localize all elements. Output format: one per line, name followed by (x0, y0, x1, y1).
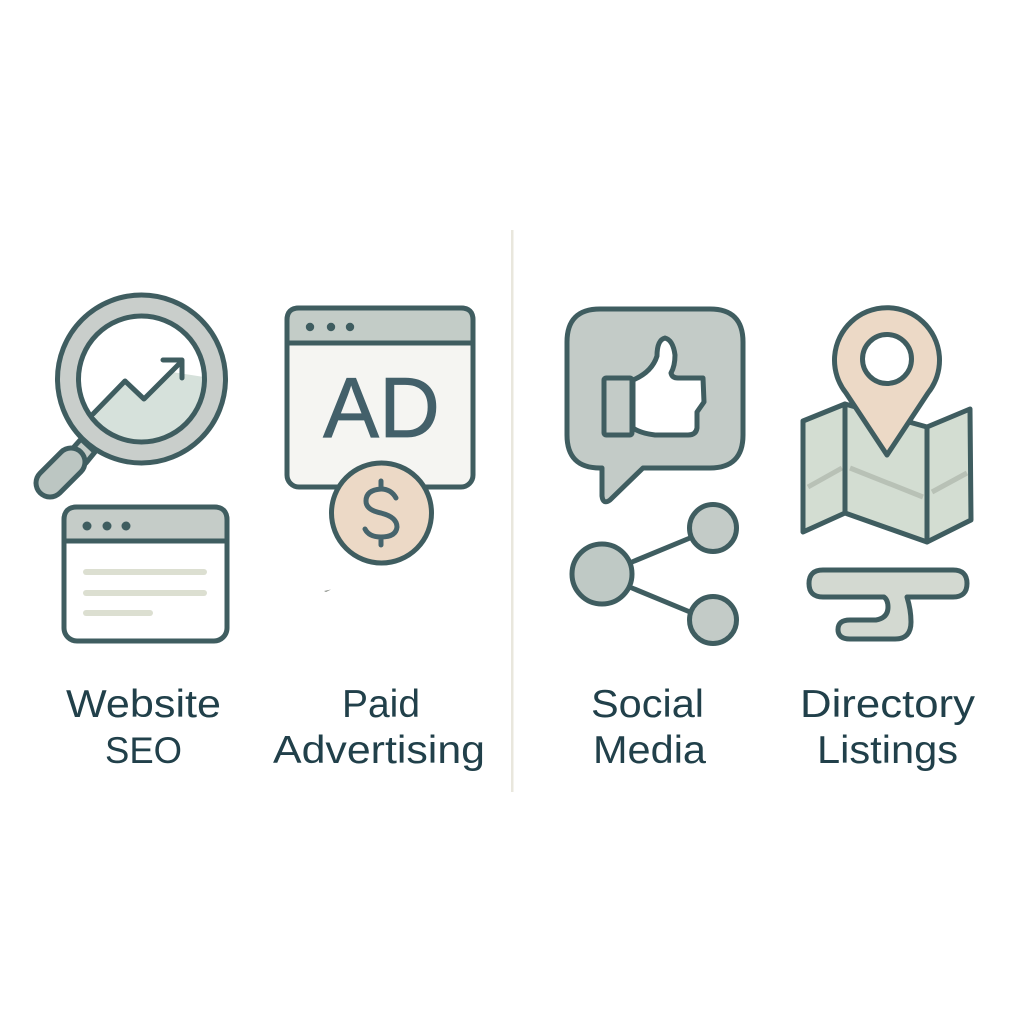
icon: ad window (287, 308, 473, 487)
icon: share network (572, 504, 736, 644)
icon: website window (64, 507, 227, 641)
icon: speech bubble with thumbs up (567, 309, 743, 502)
label: Paid Advertising: Paid (342, 683, 420, 726)
icon: listing tag shape (809, 570, 967, 639)
icon: folded map (803, 404, 971, 542)
speck (324, 590, 331, 592)
panel: social media (567, 309, 743, 772)
label: Paid Advertising (273, 683, 485, 772)
label: Directory Listings: Listings (817, 729, 958, 772)
icon: location pin (834, 308, 939, 455)
panel: website SEO (50, 295, 227, 771)
label: Social Media: Media (593, 729, 706, 772)
label: Social Media: Social (591, 683, 704, 726)
label: Directory Listings (800, 683, 976, 772)
icon: magnifying glass with growth chart (50, 295, 226, 483)
panel: paid advertising (273, 308, 485, 772)
panel: directory listings (800, 308, 976, 772)
label: Website SEO: Website (66, 683, 221, 726)
label: Paid Advertising: Advertising (273, 729, 485, 772)
icon: dollar coin (332, 463, 432, 563)
label: Website SEO: SEO (105, 730, 182, 771)
icon: ad window: AD (323, 361, 440, 456)
label: Social Media (591, 683, 706, 772)
label: Website SEO (66, 683, 221, 771)
label: Directory Listings: Directory (800, 683, 976, 726)
